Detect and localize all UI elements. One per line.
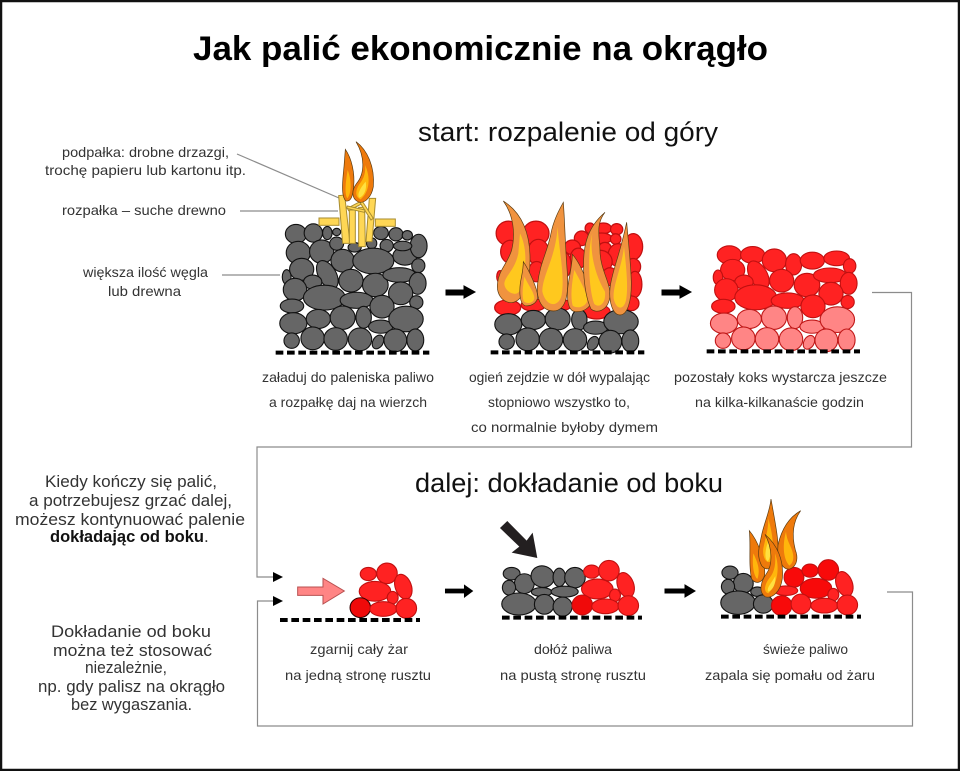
label: węgiel: większa ilość węgla: [82, 264, 208, 280]
caption 1: [262, 369, 434, 410]
caption 3: zapala się pomału od żaru: [705, 667, 875, 683]
text block: kiedy kończy się palić: [15, 472, 245, 546]
large flames: [497, 201, 631, 315]
pale lower layer: [710, 306, 855, 352]
embers: [771, 560, 858, 616]
label: podpałka: podpałka: drobne drzazgi,: [62, 144, 229, 160]
caption 2: [500, 641, 646, 683]
caption 1: załaduj do paleniska paliwo: [262, 369, 434, 385]
caption 3: świeże paliwo: [763, 641, 848, 657]
captions: start row: [262, 369, 887, 435]
text block: kiedy kończy się palić: .: [204, 527, 209, 546]
heading: dalej: dalej: dokładanie od boku: [415, 468, 723, 498]
grate: [280, 614, 420, 626]
coal: [721, 566, 773, 614]
stack 1: coal with kindling and flames: [276, 142, 429, 353]
grate: [502, 612, 642, 624]
grate: [707, 345, 860, 357]
title: Jak palić ekonomicznie na okrągło: [193, 30, 768, 68]
caption 1: a rozpałkę daj na wierzch: [269, 394, 427, 410]
caption 3: [705, 641, 875, 683]
glowing upper layer: [712, 246, 857, 318]
side-feeding illustration: step 3: [721, 499, 861, 617]
arrow: [665, 585, 695, 597]
label: podpałka: [45, 144, 246, 178]
side-feeding illustrations: steps 1 and 2: [280, 521, 642, 620]
arrow: [445, 584, 473, 598]
caption 3: pozostały koks wystarcza jeszcze: [674, 369, 887, 385]
captions: side-feeding row: [285, 641, 875, 683]
text block: dokładanie niezależnie: można też stosować: [53, 641, 213, 660]
caption 2: stopniowo wszystko to,: [488, 394, 630, 410]
text block: dokładanie niezależnie: niezależnie,: [85, 658, 167, 677]
text block: dokładanie niezależnie: Dokładanie od boku: [51, 622, 211, 641]
connector: loop from last step: [258, 592, 912, 726]
stack 3: glowing coke: [707, 246, 860, 352]
text block: kiedy kończy się palić: a potrzebujesz grzać dalej,: [29, 491, 232, 510]
text block: dokładanie niezależnie: [38, 622, 225, 714]
coal pile: [280, 224, 427, 352]
caption 1: zgarnij cały żar: [310, 641, 408, 657]
pink arrow: [298, 578, 344, 604]
label: węgiel: lub drewna: [108, 283, 181, 299]
text block: kiedy kończy się palić: możesz kontynuować palenie: [15, 510, 245, 529]
caption 2: ogień zejdzie w dół wypalając: [469, 369, 650, 385]
caption 3: na kilka-kilkanaście godzin: [695, 394, 864, 410]
arrow: [446, 286, 475, 298]
burning red fuel: [495, 221, 643, 319]
flames: [342, 142, 374, 202]
stack 2: burning: [491, 201, 644, 353]
text block: dokładanie niezależnie: np. gdy palisz na okrągło: [38, 677, 225, 696]
arrow: [662, 286, 691, 298]
flames: [749, 499, 801, 597]
embers: [572, 560, 639, 616]
grate: [721, 611, 861, 623]
text block: dokładanie niezależnie: bez wygaszania.: [71, 695, 192, 714]
text block: kiedy kończy się palić: Kiedy kończy się palić,: [45, 472, 217, 491]
embers pushed to one side: [350, 563, 417, 618]
caption 2: co normalnie byłoby dymem: [471, 419, 658, 435]
grate: [276, 347, 429, 359]
new coal on empty side: [502, 563, 585, 616]
caption 1: [285, 641, 431, 683]
remaining coal: [495, 308, 639, 353]
label: rozpałka: rozpałka – suche drewno: [62, 202, 226, 218]
kindling wood: [319, 195, 395, 247]
big black arrow: [500, 521, 537, 558]
caption 2: na pustą stronę rusztu: [500, 667, 646, 683]
caption 2: [469, 369, 658, 435]
leader lines: [222, 154, 339, 275]
label: węgiel: [82, 264, 208, 299]
text block: kiedy kończy się palić: dokładając od boku: [50, 527, 204, 546]
label: podpałka: trochę papieru lub kartonu itp.: [45, 162, 246, 178]
caption 2: dołóż paliwa: [534, 641, 612, 657]
caption 1: na jedną stronę rusztu: [285, 667, 431, 683]
connector: from start row to side-feeding row: [257, 292, 912, 582]
heading: start: start: rozpalenie od góry: [418, 117, 719, 147]
caption 3: [674, 369, 887, 410]
grate: [491, 346, 644, 358]
